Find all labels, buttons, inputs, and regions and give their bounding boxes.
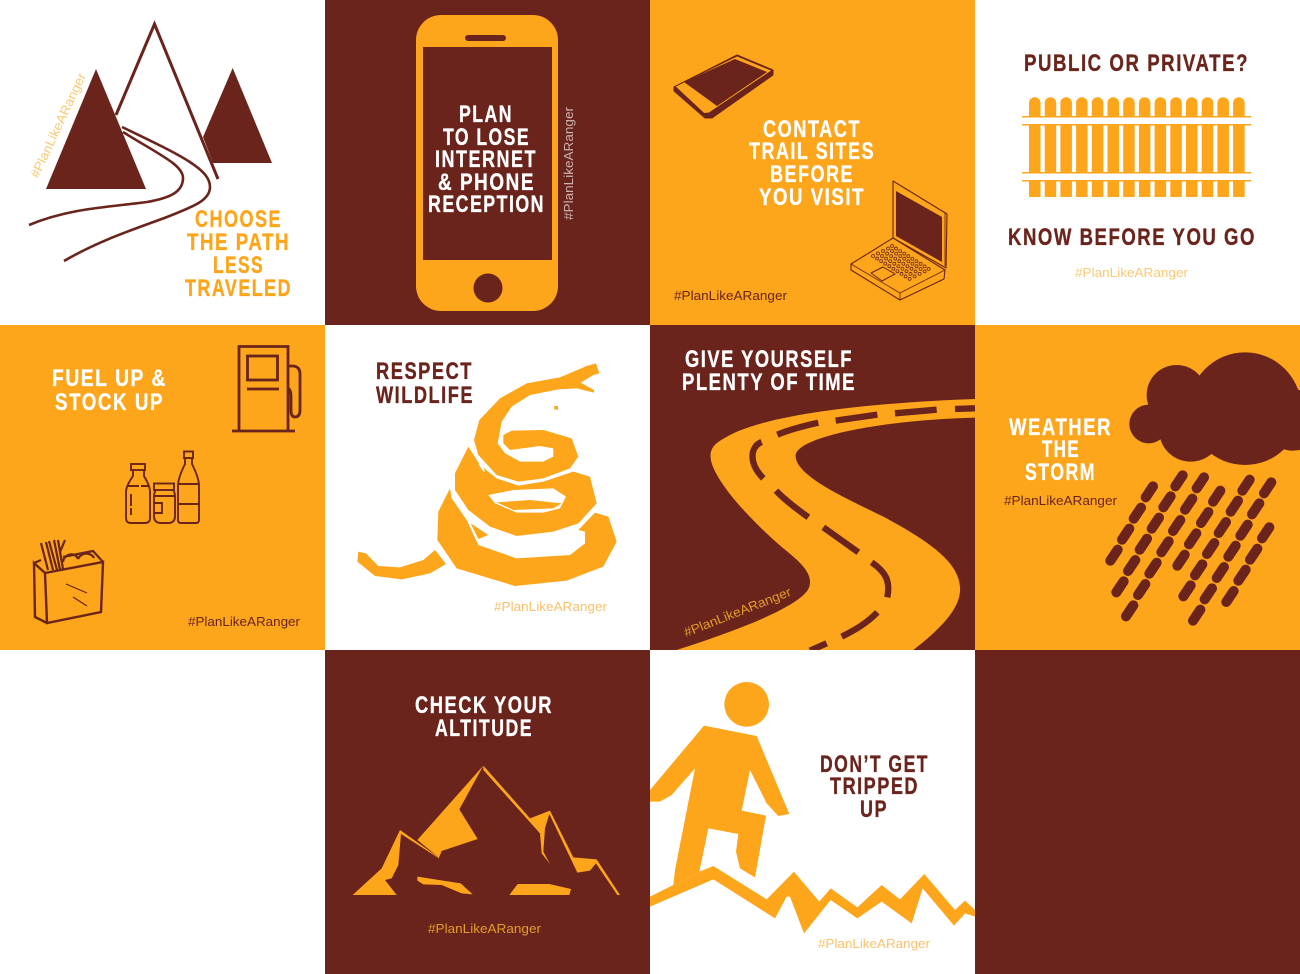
hashtag: #PlanLikeARanger bbox=[188, 614, 301, 629]
icon: laptop bbox=[851, 181, 947, 300]
hashtag: #PlanLikeARanger bbox=[428, 921, 542, 936]
heading: give yourself plenty of time: PLENTY OF TIME bbox=[682, 369, 856, 396]
panel: phone reception bbox=[325, 0, 650, 325]
heading: plan to lose internet and phone reception bbox=[428, 101, 545, 218]
icon: rain bbox=[1110, 475, 1271, 621]
heading: fuel up and stock up: STOCK UP bbox=[55, 389, 164, 416]
icon: tilted phone bbox=[674, 55, 773, 118]
icon: storm cloud bbox=[1129, 352, 1300, 465]
hashtag: #PlanLikeARanger bbox=[27, 70, 89, 180]
heading: choose the path less traveled: TRAVELED bbox=[185, 275, 292, 302]
hashtag: #PlanLikeARanger bbox=[494, 599, 608, 614]
heading: contact trail sites before you visit: TRAIL SITES bbox=[749, 138, 875, 165]
panel: choose the path bbox=[0, 0, 325, 325]
icon: smartphone bbox=[416, 15, 558, 311]
icon: coiled snake bbox=[357, 363, 617, 586]
heading: don't get tripped up: TRIPPED bbox=[830, 773, 919, 800]
icon: mountain bbox=[353, 766, 620, 895]
icon: tripping figure on rocky ground bbox=[650, 682, 975, 933]
panel: weather the storm bbox=[975, 325, 1300, 650]
heading: choose the path less traveled: THE PATH bbox=[187, 229, 290, 256]
panel: don't get tripped up bbox=[650, 650, 975, 974]
heading: respect wildlife bbox=[376, 358, 474, 409]
heading: contact trail sites before you visit: YOU VISIT bbox=[759, 184, 865, 211]
heading: plan to lose internet and phone reception: TO LOSE bbox=[443, 124, 530, 151]
panel: public or private bbox=[975, 0, 1300, 325]
panel: plenty of time bbox=[650, 325, 975, 651]
hashtag: #PlanLikeARanger bbox=[561, 106, 576, 220]
heading: give yourself plenty of time: GIVE YOURSELF bbox=[685, 346, 853, 373]
panel: respect wildlife bbox=[325, 325, 650, 650]
heading: contact trail sites before you visit: CONTACT bbox=[763, 116, 861, 143]
heading: fuel up and stock up bbox=[52, 365, 167, 416]
hashtag: #PlanLikeARanger bbox=[818, 936, 931, 951]
panel: blank brown bbox=[975, 650, 1300, 974]
hashtag: #PlanLikeARanger bbox=[674, 288, 788, 303]
hashtag: #PlanLikeARanger bbox=[682, 584, 794, 640]
icon: mountains and path bbox=[29, 24, 272, 261]
heading: weather the storm: THE bbox=[1042, 436, 1080, 463]
heading: choose the path less traveled bbox=[185, 206, 292, 302]
heading: check your altitude bbox=[415, 692, 553, 742]
hashtag: #PlanLikeARanger bbox=[1004, 493, 1118, 508]
hashtag: #PlanLikeARanger bbox=[1075, 265, 1189, 280]
icon: bottles and jar bbox=[126, 452, 199, 523]
heading: respect wildlife: RESPECT bbox=[376, 358, 473, 385]
panel: contact trail sites bbox=[650, 0, 975, 325]
heading: plan to lose internet and phone reception: PLAN bbox=[459, 101, 513, 128]
icon: winding road bbox=[677, 399, 975, 651]
panel: fuel up and stock up bbox=[0, 325, 325, 650]
heading: fuel up and stock up: FUEL UP & bbox=[52, 365, 167, 392]
heading: give yourself plenty of time bbox=[682, 346, 856, 396]
heading: choose the path less traveled: LESS bbox=[213, 252, 264, 279]
heading: weather the storm bbox=[1009, 414, 1112, 486]
heading: don't get tripped up bbox=[820, 751, 929, 823]
heading: check your altitude: CHECK YOUR bbox=[415, 692, 553, 719]
heading: weather the storm: STORM bbox=[1025, 459, 1096, 486]
icon: fuel pump bbox=[232, 346, 300, 431]
heading: check your altitude: ALTITUDE bbox=[435, 715, 533, 742]
heading: contact trail sites before you visit: BEFORE bbox=[770, 161, 854, 188]
icon: picket fence bbox=[1022, 97, 1251, 197]
panel: check your altitude bbox=[325, 650, 650, 974]
heading: plan to lose internet and phone reception: & PHONE bbox=[438, 169, 535, 196]
heading: choose the path less traveled: CHOOSE bbox=[195, 206, 282, 233]
heading: respect wildlife: WILDLIFE bbox=[376, 382, 474, 409]
icon: grocery bag bbox=[34, 540, 103, 623]
panel: blank white bbox=[0, 650, 325, 974]
heading: plan to lose internet and phone reception: RECEPTION bbox=[428, 191, 545, 218]
heading: weather the storm: WEATHER bbox=[1009, 414, 1112, 441]
heading: plan to lose internet and phone reception: INTERNET bbox=[435, 146, 537, 173]
heading: contact trail sites before you visit bbox=[749, 116, 875, 211]
heading: don't get tripped up: DON’T GET bbox=[820, 751, 929, 778]
heading: don't get tripped up: UP bbox=[860, 796, 888, 823]
